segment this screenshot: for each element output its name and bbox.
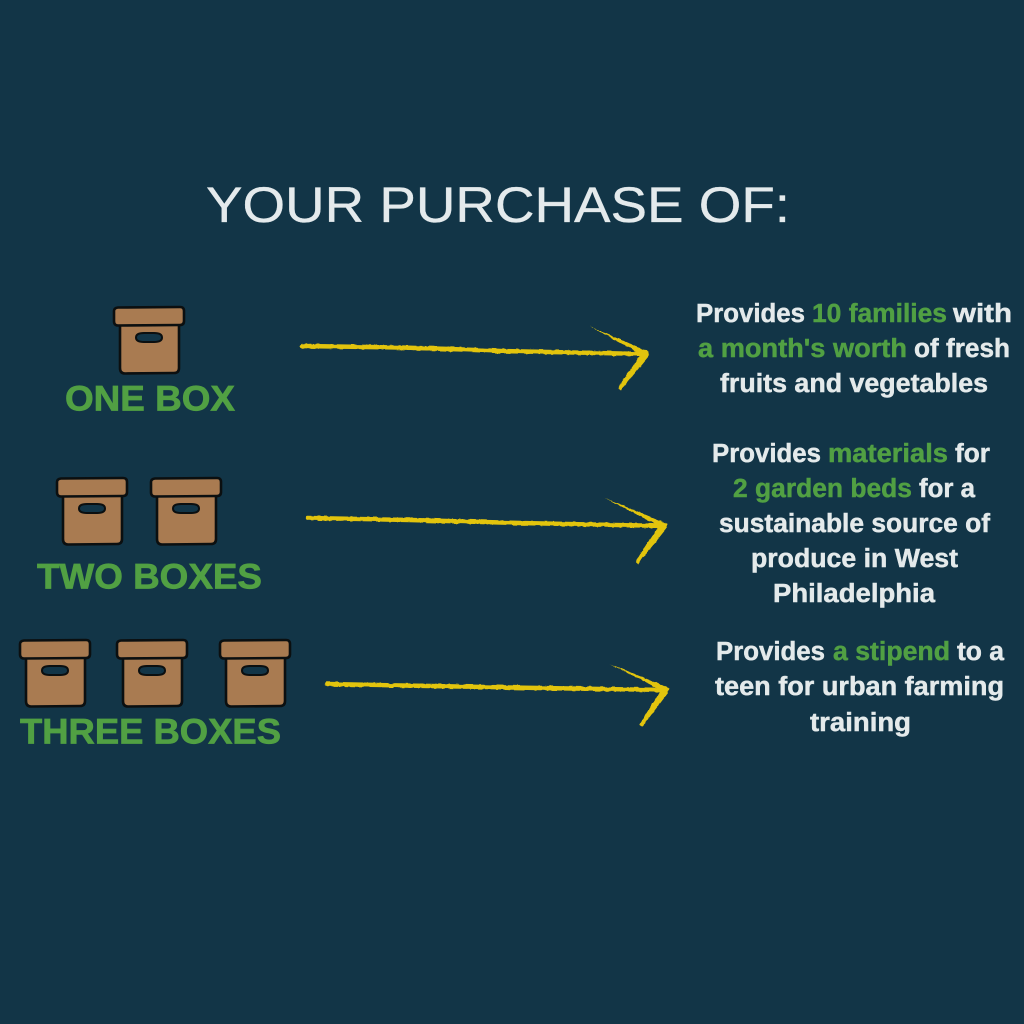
text block: two boxes result: sustainable source of <box>719 510 991 538</box>
text block: one box result <box>696 300 1012 398</box>
text block: one box result: Provides <box>696 300 805 328</box>
title: YOUR PURCHASE OF: <box>206 176 790 233</box>
text block: three boxes result: a stipend <box>833 638 950 666</box>
icon: box left <box>20 640 90 706</box>
icon: box left <box>57 478 127 544</box>
label: one box: ONE BOX <box>65 380 236 418</box>
text block: one box result: 10 families <box>812 300 947 328</box>
icon: box right <box>151 478 221 544</box>
row: two boxes <box>37 478 262 596</box>
text block: one box result: with <box>952 300 1012 328</box>
arrow: one box <box>302 326 649 390</box>
text block: two boxes result: materials <box>828 440 948 468</box>
text block: three boxes result: teen for urban farming <box>715 673 1004 701</box>
text block: two boxes result: Provides <box>712 440 821 468</box>
icon: box middle <box>117 640 187 706</box>
text block: two boxes result <box>712 440 991 608</box>
arrow: two boxes <box>308 498 668 564</box>
text block: one box result: fruits and vegetables <box>720 370 988 398</box>
icon: box <box>114 307 184 374</box>
text block: one box result: of fresh <box>914 335 1010 363</box>
text block: three boxes result <box>715 638 1005 737</box>
text block: two boxes result: 2 garden beds <box>733 475 912 503</box>
text block: one box result: a month's worth <box>698 335 907 363</box>
label: two boxes: TWO BOXES <box>37 558 262 596</box>
text block: two boxes result: Philadelphia <box>773 580 936 608</box>
text block: three boxes result: training <box>810 709 911 737</box>
row: one box <box>65 307 236 418</box>
text block: two boxes result: produce in West <box>751 545 959 573</box>
text block: two boxes result: for <box>955 440 990 468</box>
row: three boxes <box>20 640 290 752</box>
text block: two boxes result: for a <box>919 475 976 503</box>
arrow: three boxes <box>327 664 670 727</box>
text block: three boxes result: Provides <box>716 638 825 666</box>
icon: box right <box>220 640 290 706</box>
label: three boxes: THREE BOXES <box>20 712 281 752</box>
text block: three boxes result: to a <box>957 638 1005 666</box>
